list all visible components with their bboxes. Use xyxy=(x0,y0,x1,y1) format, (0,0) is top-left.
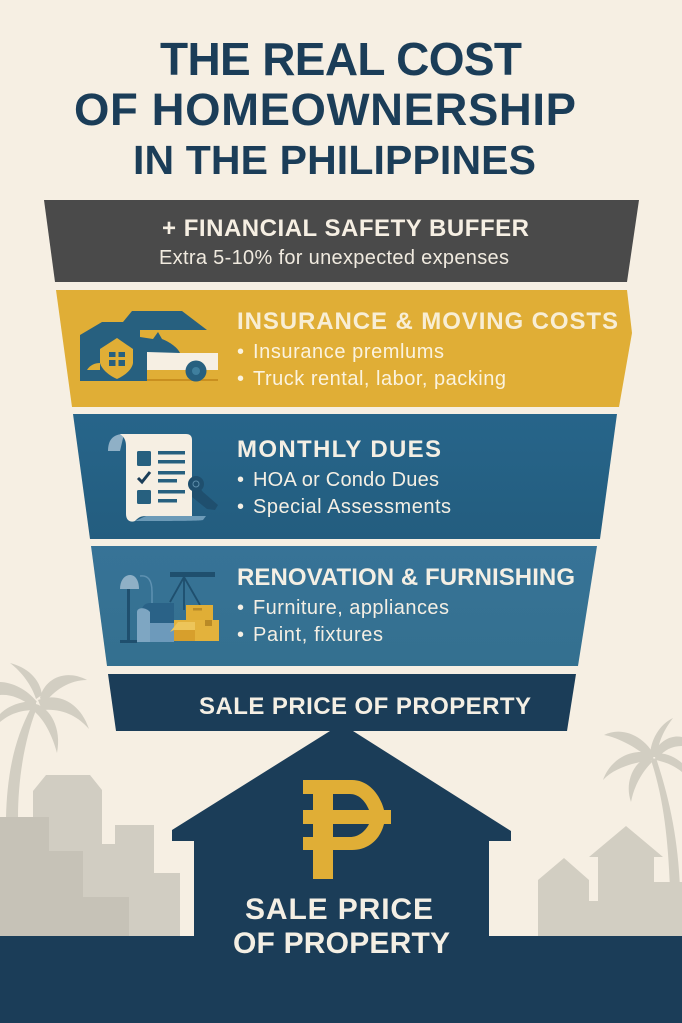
band: renovation and furnishing: Paint, fixtures xyxy=(253,624,383,646)
band: monthly dues: • xyxy=(237,496,244,518)
icon: magnifying glass xyxy=(192,478,218,510)
band: renovation and furnishing: • xyxy=(237,624,244,646)
band: financial safety buffer xyxy=(44,200,639,282)
band: monthly dues: HOA or Condo Dues xyxy=(253,469,439,491)
front buildings left xyxy=(0,817,129,936)
icon: furniture and boxes xyxy=(120,572,219,643)
palm tree right xyxy=(651,758,680,888)
band: insurance and moving costs: Insurance premlums xyxy=(253,341,444,363)
band: sale price of property xyxy=(108,674,576,731)
house label: OF PROPERTY xyxy=(233,927,450,960)
houses right xyxy=(538,826,682,936)
band: renovation and furnishing xyxy=(91,546,597,666)
rear buildings left xyxy=(0,775,180,936)
icon: peso sign xyxy=(303,780,391,879)
icon: house and truck xyxy=(80,311,218,382)
band: insurance and moving costs: • xyxy=(237,368,244,390)
title: THE REAL COST xyxy=(160,33,522,85)
band: renovation and furnishing: • xyxy=(237,597,244,619)
band: insurance and moving costs xyxy=(56,290,632,407)
title: IN THE PHILIPPINES xyxy=(133,137,536,183)
band: renovation and furnishing: Furniture, appliances xyxy=(253,597,449,619)
band: monthly dues xyxy=(73,414,617,539)
band: insurance and moving costs: • xyxy=(237,341,244,363)
title xyxy=(74,33,576,183)
house base xyxy=(0,731,682,1023)
icon: checklist document xyxy=(108,434,218,522)
background skyline left xyxy=(0,663,180,936)
band: renovation and furnishing: RENOVATION & FURNISHING xyxy=(237,564,575,591)
house label xyxy=(233,893,450,960)
band: monthly dues: Special Assessments xyxy=(253,496,451,518)
band: monthly dues: MONTHLY DUES xyxy=(237,436,441,463)
band: financial safety buffer: Extra 5-10% for unexpected expenses xyxy=(159,247,509,269)
palm tree left xyxy=(0,663,89,818)
band: monthly dues: • xyxy=(237,469,244,491)
title: OF HOMEOWNERSHIP xyxy=(74,84,576,135)
band: insurance and moving costs: INSURANCE & MOVING COSTS xyxy=(237,308,618,335)
icon: shield xyxy=(100,338,133,379)
band: financial safety buffer: + FINANCIAL SAFETY BUFFER xyxy=(162,215,529,242)
background skyline right xyxy=(538,718,682,936)
band: insurance and moving costs: Truck rental, labor, packing xyxy=(253,368,506,390)
band: sale price of property: SALE PRICE OF PROPERTY xyxy=(199,693,531,720)
house label: SALE PRICE xyxy=(245,893,433,926)
